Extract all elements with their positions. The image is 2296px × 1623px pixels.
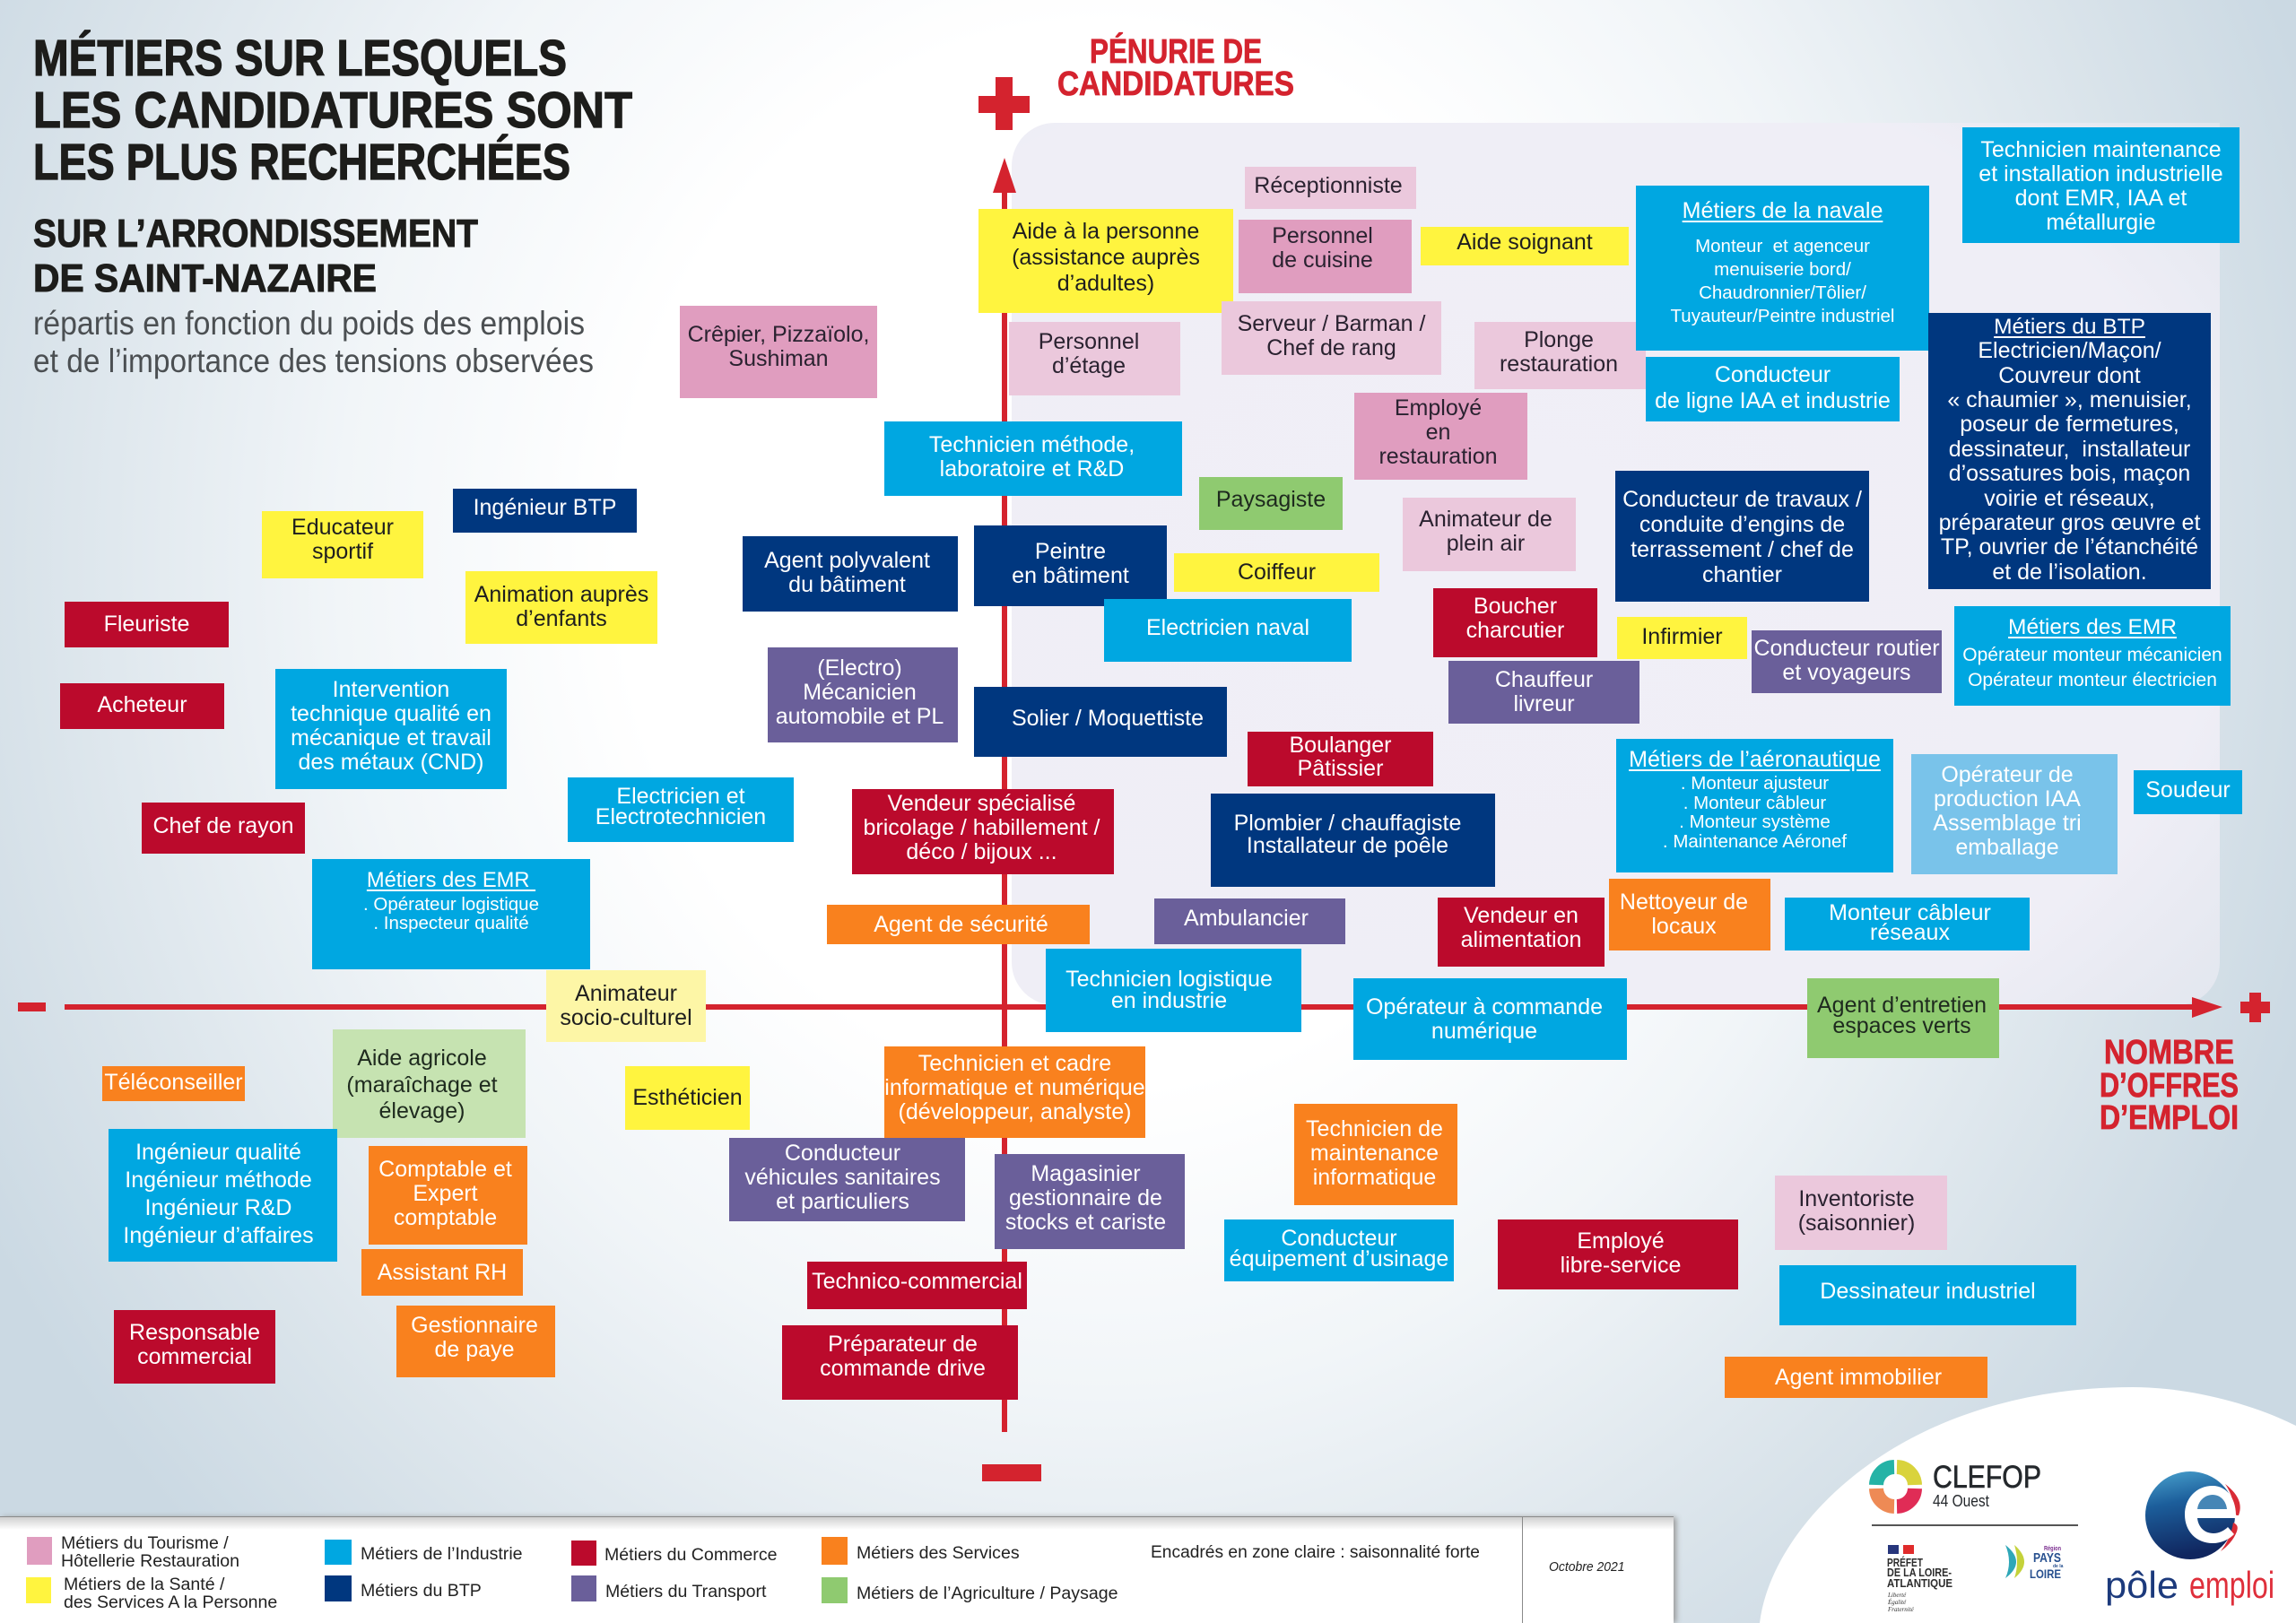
job box: Métiers de l'aéronautique: . Maintenance Aéronef — [1663, 830, 1847, 852]
subtitle — [33, 212, 478, 300]
vertical axis heading: PÉNURIE DE — [1090, 31, 1262, 71]
job box: Opérateur à commande numérique: Opérateur à commande — [1366, 994, 1603, 1019]
job box: Aide agricole: Aide agricole — [357, 1046, 487, 1071]
job box: Métiers du BTP: Couvreur dont — [1998, 363, 2141, 388]
job box: Métiers de la navale: Métiers de la navale — [1683, 198, 1883, 223]
legend: BTP: Métiers du BTP — [361, 1582, 482, 1601]
job box: Métiers de l'aéronautique: . Monteur ajusteur — [1681, 773, 1829, 794]
job box: Comptable — [369, 1146, 527, 1245]
logo: Pôle emploi: pôle — [2105, 1564, 2179, 1606]
job box: Conducteur de ligne: de ligne IAA et industrie — [1655, 387, 1891, 412]
job box: Aide agricole: (maraîchage et — [346, 1072, 498, 1098]
job box: Animation auprès d'enfants: d’enfants — [516, 606, 607, 631]
legend: BTP — [325, 1575, 482, 1601]
legend: agriculture — [822, 1577, 1118, 1603]
job box: Inventoriste: (saisonnier) — [1798, 1211, 1915, 1236]
job box: Technicien logistique: en industrie — [1111, 988, 1227, 1013]
logo: Préfet: Liberté — [1887, 1592, 1907, 1599]
job box: Animateur socio-culturel: Animateur — [575, 981, 677, 1006]
job box: Esthéticien — [625, 1066, 750, 1130]
job box: Boulanger Pâtissier: Pâtissier — [1298, 755, 1383, 780]
job box: (Electro) Mécanicien — [768, 647, 958, 742]
job box: Nettoyeur de locaux: locaux — [1651, 914, 1717, 939]
logo: Préfet: PRÉFET — [1887, 1556, 1923, 1569]
job box: Responsable commercial: commercial — [137, 1344, 252, 1369]
legend: tourisme: Hôtellerie Restauration — [61, 1551, 239, 1571]
job box: Soudeur — [2134, 770, 2242, 814]
job box: Opérateur de production IAA: emballage — [1955, 835, 2059, 860]
job box: Esthéticien: Esthéticien — [632, 1085, 743, 1110]
job box: Conducteur routier — [1752, 630, 1942, 693]
job box: Ingénieur qualité: Ingénieur d’affaires — [123, 1223, 314, 1248]
legend divider: date cell — [1522, 1517, 1523, 1623]
logo: Préfet: ATLANTIQUE — [1887, 1576, 1952, 1590]
job box: Technicien et cadre — [884, 1046, 1145, 1138]
job box: Conducteur équipement: Conducteur — [1281, 1225, 1397, 1250]
job box: Monteur câbleur réseaux: Monteur câbleur — [1829, 900, 1991, 925]
job box: Technico-commercial — [807, 1262, 1027, 1309]
horizontal axis arrow — [65, 997, 2222, 1018]
job box: Serveur: Chef de rang — [1266, 335, 1396, 360]
job box: Serveur: Serveur / Barman / — [1238, 310, 1425, 335]
job box: Solier: Solier / Moquettiste — [1012, 705, 1204, 730]
horizontal axis heading: NOMBRE — [2104, 1034, 2234, 1072]
job box: Métiers des EMR droite: Opérateur monteur mécanicien — [1962, 644, 2222, 665]
job box: Ingénieur qualité: Ingénieur méthode — [125, 1167, 312, 1193]
job box: Technico-commercial: Technico-commercial — [812, 1269, 1022, 1294]
logo: Préfet: Fraternité — [1887, 1606, 1915, 1613]
job box: Métiers des EMR droite — [1954, 606, 2231, 706]
job box: Employé libre-service: Employé — [1577, 1228, 1665, 1254]
job box: Intervention technique: mécanique et travail — [291, 725, 491, 751]
job box: Magasinier: Magasinier — [1031, 1160, 1141, 1185]
logo: Région Pays de la Loire: PAYS — [2033, 1550, 2061, 1566]
job box: Comptable: Comptable et — [378, 1157, 512, 1182]
subtitle: DE SAINT-NAZAIRE — [33, 256, 377, 300]
job box: Electricien naval — [1104, 599, 1352, 662]
job box: Animateur de plein air: plein air — [1447, 531, 1525, 556]
main title: LES CANDIDATURES SONT — [33, 82, 632, 139]
job box: Educateur sportif — [262, 511, 423, 578]
job box: Coiffeur — [1174, 553, 1379, 592]
job box: Métiers du BTP: voirie et réseaux, — [1984, 486, 2155, 511]
job box: Animateur socio-culturel — [546, 970, 706, 1042]
legend: industrie: Métiers de l’Industrie — [361, 1545, 523, 1564]
job box: Métiers du BTP: poseur de fermetures, — [1960, 412, 2179, 437]
vertical axis arrow — [993, 158, 1016, 1432]
job box: Responsable commercial: Responsable — [129, 1320, 260, 1345]
job box: Paysagiste: Paysagiste — [1216, 487, 1326, 512]
plus sign right — [2240, 993, 2270, 1022]
job box: Serveur — [1222, 301, 1441, 375]
job box: Métiers de la navale: menuiserie bord/ — [1714, 259, 1851, 280]
job box: Conducteur véhicules — [729, 1138, 965, 1221]
job box: Employé en restauration: restauration — [1378, 443, 1498, 468]
minus sign left — [18, 1002, 46, 1011]
job box: Métiers du BTP: TP, ouvrier de l’étanchéité — [1941, 534, 2198, 560]
job box: (Electro) Mécanicien: automobile et PL — [776, 704, 944, 729]
job box: Plombier: Installateur de poêle — [1247, 833, 1448, 858]
job box: Crêpier: Sushiman — [728, 346, 829, 371]
job box: Personnel d'étage: Personnel — [1039, 328, 1139, 353]
job box: Aide agricole: élevage) — [379, 1098, 465, 1124]
job box: Technicien maintenance — [1962, 127, 2239, 243]
job box: Aide soignant: Aide soignant — [1457, 230, 1593, 255]
job box: Employé libre-service: libre-service — [1561, 1253, 1681, 1278]
vertical axis heading — [1057, 31, 1294, 103]
job box: Electricien et Electrotechnicien — [568, 777, 794, 842]
job box: Personnel de cuisine — [1239, 220, 1412, 293]
job box: Employé libre-service — [1498, 1219, 1738, 1289]
job box: Métiers des EMR droite: Opérateur monteur électricien — [1968, 669, 2217, 690]
job box: Employé en restauration — [1354, 393, 1527, 480]
logo: Pôle emploi — [2105, 1471, 2274, 1606]
job box: Intervention technique: des métaux (CND) — [298, 750, 483, 775]
job box: Agent polyvalent: du bâtiment — [788, 572, 906, 597]
description — [33, 305, 594, 379]
job box: Technicien maintenance: métallurgie — [2046, 210, 2156, 235]
logo: Région Pays de la Loire: de la — [2053, 1564, 2064, 1569]
job box: Gestionnaire de paye — [396, 1306, 555, 1377]
job box: Chauffeur livreur: livreur — [1513, 690, 1575, 716]
job box: Métiers de la navale: Chaudronnier/Tôlier/ — [1699, 282, 1866, 303]
job box: Solier — [974, 687, 1227, 757]
job box: Magasinier — [995, 1154, 1185, 1249]
legend: agriculture: Métiers de l’Agriculture / Paysage — [857, 1584, 1118, 1603]
job box: Vendeur en alimentation: Vendeur en — [1464, 902, 1578, 927]
job box: Chef de rayon: Chef de rayon — [152, 813, 294, 838]
job box: Agent polyvalent — [743, 536, 958, 612]
legend: santé: Métiers de la Santé / — [64, 1575, 224, 1594]
job box: Animateur de plein air: Animateur de — [1419, 507, 1552, 532]
job box: Animateur de plein air — [1403, 498, 1576, 571]
job box: Conducteur de ligne: Conducteur — [1715, 362, 1831, 387]
shaded high-tension panel — [1012, 123, 2220, 1005]
job box: Boulanger Pâtissier — [1248, 732, 1433, 786]
job box: Métiers des EMR gauche: Métiers des EMR — [367, 868, 530, 891]
job box: Conducteur véhicules: et particuliers — [776, 1189, 909, 1214]
legend: tourisme: Métiers du Tourisme / — [61, 1534, 229, 1553]
job box: Electricien et Electrotechnicien: Electricien et — [616, 784, 745, 809]
logo: Préfet — [1887, 1545, 1952, 1613]
job box: Boucher charcutier — [1433, 588, 1597, 657]
job box: Electricien naval: Electricien naval — [1146, 615, 1309, 640]
job box: Conducteur équipement: équipement d’usinage — [1230, 1246, 1448, 1271]
job box: Assistant RH: Assistant RH — [378, 1259, 507, 1284]
job box: Crêpier — [680, 306, 877, 398]
job box: Technicien méthode: Technicien méthode, — [929, 432, 1135, 457]
job box: Téléconseiller — [102, 1066, 245, 1101]
job box: Conducteur véhicules: Conducteur — [785, 1141, 900, 1166]
job box: Conducteur véhicules: véhicules sanitaires — [744, 1164, 941, 1189]
logo: Préfet: DE LA LOIRE- — [1887, 1566, 1952, 1579]
job box: Conducteur de travaux: chantier — [1702, 561, 1782, 586]
job box: Ingénieur qualité: Ingénieur R&D — [145, 1194, 291, 1219]
logo divider — [1872, 1524, 2078, 1526]
legend: tourisme — [27, 1534, 239, 1571]
job box: Conducteur routier: Conducteur routier — [1753, 635, 1940, 660]
job box: Intervention technique: Intervention — [333, 677, 449, 702]
logo: Région Pays de la Loire: Région — [2044, 1546, 2061, 1552]
job box: Agent de sécurité: Agent de sécurité — [874, 911, 1048, 936]
job box: Dessinateur industriel — [1779, 1265, 2076, 1325]
job box: Gestionnaire de paye: Gestionnaire — [411, 1313, 538, 1338]
job box: Vendeur spécialisé — [852, 789, 1114, 874]
job box: Opérateur à commande numérique: numérique — [1431, 1019, 1537, 1044]
job box: Ingénieur BTP — [453, 489, 637, 533]
job box: Intervention technique: technique qualité en — [291, 701, 491, 726]
job box: Métiers des EMR gauche: . Opérateur logistique — [363, 893, 539, 915]
job box: Métiers du BTP: « chaumier », menuisier, — [1947, 387, 2192, 412]
job box: Métiers des EMR droite: Métiers des EMR — [2008, 615, 2177, 638]
description: et de l’importance des tensions observées — [33, 343, 594, 379]
job box: Technicien logistique: Technicien logistique — [1065, 967, 1273, 992]
job box: Plombier — [1211, 794, 1495, 887]
legend: services — [822, 1537, 1020, 1565]
main title — [33, 30, 632, 191]
legend: commerce: Métiers du Commerce — [604, 1546, 777, 1565]
legend: santé: des Services A la Personne — [64, 1593, 277, 1612]
job box: Opérateur de production IAA: Opérateur de — [1941, 762, 2074, 787]
job box: Plonge — [1474, 322, 1646, 389]
job box: Téléconseiller: Téléconseiller — [104, 1069, 243, 1094]
job box: Technicien et cadre: informatique et numérique — [884, 1075, 1145, 1100]
job box: Aide à la personne — [978, 209, 1233, 313]
job box: Métiers du BTP: d’ossatures bois, maçon — [1949, 461, 2190, 486]
job box: Métiers du BTP: Electricien/Maçon/ — [1978, 338, 2161, 363]
job box: Conducteur routier: et voyageurs — [1782, 660, 1911, 685]
job box: Plombier: Plombier / chauffagiste — [1234, 811, 1461, 836]
job box: Métiers de la navale: Monteur et agenceur — [1695, 236, 1870, 256]
job box: Infirmier: Infirmier — [1641, 624, 1723, 649]
job box: Fleuriste: Fleuriste — [104, 612, 189, 637]
job box: Educateur sportif: sportif — [312, 538, 373, 563]
job box: Aide soignant — [1421, 227, 1629, 265]
job box: Agent immobilier — [1725, 1357, 1987, 1398]
job box: Assistant RH — [361, 1249, 523, 1296]
job box: Technicien et cadre: Technicien et cadre — [918, 1051, 1111, 1076]
job box: Conducteur de ligne — [1646, 357, 1900, 421]
job box: Paysagiste — [1199, 477, 1343, 530]
logo: Préfet: Égalité — [1887, 1599, 1907, 1606]
job box: Agent immobilier: Agent immobilier — [1775, 1365, 1942, 1390]
legend: commerce — [571, 1541, 777, 1566]
job box: Préparateur de commande drive: Préparateur de — [828, 1332, 978, 1357]
job box: Technicien méthode: laboratoire et R&D — [940, 456, 1124, 481]
legend: services: Métiers des Services — [857, 1544, 1020, 1563]
horizontal axis heading — [2100, 1034, 2239, 1137]
job box: Peintre: en bâtiment — [1012, 563, 1129, 588]
job box: Nettoyeur de locaux: Nettoyeur de — [1620, 890, 1748, 915]
job box: Agent polyvalent: Agent polyvalent — [764, 548, 930, 573]
job box: Réceptionniste — [1245, 167, 1416, 209]
job box: Métiers du BTP: et de l’isolation. — [1992, 560, 2147, 585]
legend: transport — [571, 1575, 766, 1601]
horizontal axis heading: D’EMPLOI — [2100, 1099, 2239, 1137]
job box: Nettoyeur de locaux — [1609, 879, 1770, 950]
job box: Plonge: restauration — [1500, 352, 1618, 377]
job box: Technicien de maintenance informatique — [1294, 1104, 1457, 1205]
job box: Aide à la personne: Aide à la personne — [1013, 219, 1199, 244]
job box: Métiers du BTP: dessinateur, installateur — [1949, 437, 2190, 462]
job box: Aide à la personne: (assistance auprès — [1012, 245, 1200, 270]
main title: MÉTIERS SUR LESQUELS — [33, 30, 567, 87]
logo: CLEFOP — [1876, 1460, 2041, 1510]
job box: Préparateur de commande drive — [782, 1325, 1018, 1400]
job box: Dessinateur industriel: Dessinateur industriel — [1820, 1279, 2036, 1304]
job box: Ingénieur qualité — [109, 1129, 337, 1262]
job box: Monteur câbleur réseaux — [1785, 898, 2030, 950]
legend note: Encadrés en zone claire : saisonnalité forte — [1151, 1543, 1480, 1562]
job box: Technicien maintenance: dont EMR, IAA et — [2015, 186, 2187, 211]
job box: Réceptionniste: Réceptionniste — [1254, 172, 1403, 197]
job box: Inventoriste — [1775, 1176, 1947, 1250]
job box: Acheteur — [60, 683, 224, 729]
job box: Vendeur en alimentation: alimentation — [1461, 927, 1581, 952]
date: Octobre 2021 — [1549, 1559, 1625, 1575]
logo: Région Pays de la Loire: LOIRE — [2030, 1567, 2061, 1581]
job box: Boucher charcutier: charcutier — [1466, 617, 1564, 642]
job box: Personnel d'étage — [1009, 322, 1180, 395]
legend: transport: Métiers du Transport — [605, 1583, 766, 1601]
job box: Crêpier: Crêpier, Pizzaïolo, — [688, 321, 869, 346]
job box: Métiers du BTP — [1928, 313, 2211, 589]
job box: Ambulancier: Ambulancier — [1184, 906, 1309, 931]
job box: Chef de rayon — [142, 803, 305, 854]
job box: (Electro) Mécanicien: (Electro) — [817, 655, 902, 681]
job box: Métiers de la navale — [1636, 186, 1929, 351]
horizontal axis heading: D’OFFRES — [2100, 1067, 2239, 1105]
job box: Opérateur de production IAA: Assemblage tri — [1933, 811, 2082, 836]
subtitle: SUR L’ARRONDISSEMENT — [33, 212, 478, 256]
job box: Chauffeur livreur — [1448, 661, 1639, 724]
job box: Animation auprès d'enfants: Animation auprès — [474, 582, 648, 607]
job box: Technicien maintenance: Technicien maintenance — [1980, 137, 2222, 162]
job box: Technicien méthode — [884, 421, 1182, 496]
job box: Technicien logistique — [1046, 949, 1301, 1032]
job box: Agent d'entretien — [1807, 978, 1999, 1058]
job box: Métiers des EMR gauche: . Inspecteur qualité — [373, 913, 529, 933]
job box: Technicien de maintenance informatique: maintenance — [1310, 1141, 1439, 1166]
job box: Métiers du BTP: Métiers du BTP — [1994, 315, 2145, 339]
job box: Agent d'entretien: espaces verts — [1832, 1013, 1971, 1038]
legend: industrie — [325, 1540, 523, 1565]
job box: Coiffeur: Coiffeur — [1238, 560, 1316, 585]
description: répartis en fonction du poids des emplois — [33, 305, 585, 342]
job box: (Electro) Mécanicien: Mécanicien — [803, 680, 917, 705]
job box: Agent de sécurité — [827, 905, 1090, 944]
minus sign bottom — [982, 1464, 1041, 1481]
job box: Conducteur de travaux: terrassement / chef de — [1631, 536, 1854, 561]
job box: Comptable: comptable — [394, 1205, 497, 1230]
job box: Préparateur de commande drive: commande drive — [820, 1356, 986, 1381]
main title: LES PLUS RECHERCHÉES — [33, 134, 570, 191]
job box: Conducteur de travaux: Conducteur de travaux / — [1622, 486, 1862, 511]
job box: Opérateur de production IAA: production IAA — [1934, 786, 2081, 812]
job box: Monteur câbleur réseaux: réseaux — [1870, 920, 1950, 945]
job box: Technicien et cadre: (développeur, analyste) — [899, 1099, 1131, 1124]
job box: Ingénieur BTP: Ingénieur BTP — [474, 495, 616, 520]
job box: Fleuriste — [65, 602, 229, 647]
job box: Peintre: Peintre — [1035, 538, 1106, 563]
job box: Electricien et Electrotechnicien: Electrotechnicien — [596, 804, 766, 829]
job box: Personnel de cuisine: Personnel — [1272, 223, 1373, 248]
plus sign top — [978, 77, 1030, 130]
job box: Comptable: Expert — [413, 1180, 478, 1205]
job box: Technicien de maintenance informatique: Technicien de — [1306, 1115, 1443, 1141]
job box: Ingénieur qualité: Ingénieur qualité — [135, 1139, 301, 1164]
job box: Responsable commercial — [114, 1310, 275, 1384]
job box: Métiers des EMR gauche — [312, 859, 590, 969]
job box: Educateur sportif: Educateur — [291, 515, 394, 540]
vertical axis heading: CANDIDATURES — [1057, 65, 1294, 103]
job box: Peintre — [974, 525, 1167, 606]
job box: Métiers du BTP: préparateur gros œuvre et — [1939, 510, 2200, 535]
job box: Conducteur équipement — [1224, 1219, 1454, 1281]
job box: Conducteur de travaux — [1615, 471, 1869, 602]
job box: Boucher charcutier: Boucher — [1474, 594, 1557, 619]
job box: Métiers de l'aéronautique — [1616, 739, 1893, 872]
job box: Employé en restauration: en — [1426, 420, 1450, 445]
job box: Employé en restauration: Employé — [1395, 395, 1482, 420]
job box: Opérateur à commande numérique — [1353, 978, 1627, 1060]
job box: Vendeur en alimentation — [1438, 898, 1605, 967]
job box: Agent d'entretien: Agent d’entretien — [1817, 993, 1987, 1018]
job box: Animateur socio-culturel: socio-culturel — [560, 1004, 692, 1029]
job box: Personnel d'étage: d’étage — [1052, 353, 1126, 378]
job box: Métiers de l'aéronautique: . Monteur câbleur — [1683, 793, 1826, 812]
job box: Inventoriste: Inventoriste — [1798, 1185, 1915, 1211]
job box: Magasinier: gestionnaire de — [1009, 1185, 1162, 1211]
job box: Infirmier — [1617, 617, 1747, 659]
logo: CLEFOP: 44 Ouest — [1933, 1492, 1989, 1510]
job box: Soudeur: Soudeur — [2145, 777, 2231, 803]
job box: Magasinier: stocks et cariste — [1005, 1209, 1166, 1234]
job box: Chauffeur livreur: Chauffeur — [1495, 667, 1593, 692]
job box: Métiers de l'aéronautique: . Monteur système — [1679, 812, 1831, 832]
job box: Aide à la personne: d’adultes) — [1057, 271, 1154, 296]
logo: CLEFOP: CLEFOP — [1933, 1460, 2041, 1495]
job box: Aide agricole — [333, 1029, 526, 1138]
job box: Boulanger Pâtissier: Boulanger — [1290, 732, 1391, 757]
job box: Métiers de la navale: Tuyauteur/Peintre industriel — [1671, 306, 1894, 326]
job box: Intervention technique — [275, 669, 507, 789]
job box: Acheteur: Acheteur — [97, 692, 187, 717]
job box: Personnel de cuisine: de cuisine — [1272, 247, 1373, 273]
job box: Vendeur spécialisé: déco / bijoux ... — [906, 839, 1057, 864]
job box: Métiers de l'aéronautique: Métiers de l’aéronautique — [1629, 747, 1881, 772]
logo: Région Pays de la Loire — [2005, 1545, 2064, 1581]
job box: Animation auprès d'enfants — [465, 571, 657, 644]
job box: Opérateur de production IAA — [1911, 754, 2118, 874]
legend bar — [0, 1517, 1674, 1623]
job box: Plonge: Plonge — [1524, 326, 1594, 352]
job box: Vendeur spécialisé: bricolage / habillement / — [863, 815, 1100, 840]
legend: santé — [26, 1575, 277, 1612]
job box: Technicien de maintenance informatique: informatique — [1313, 1164, 1436, 1189]
job box: Conducteur de travaux: conduite d’engins de — [1639, 511, 1845, 536]
job box: Gestionnaire de paye: de paye — [435, 1337, 514, 1362]
job box: Ambulancier — [1154, 898, 1345, 944]
job box: Vendeur spécialisé: Vendeur spécialisé — [888, 791, 1075, 816]
job box: Technicien maintenance: et installation industrielle — [1979, 161, 2223, 187]
